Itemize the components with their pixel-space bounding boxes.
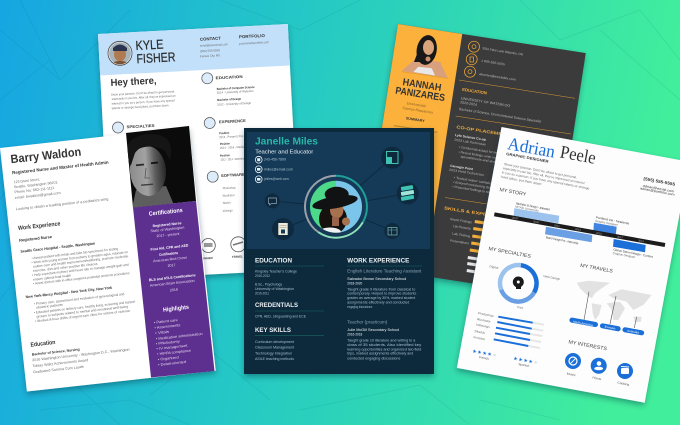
Kyle contact block — [200, 33, 269, 58]
Barry certifications: 2017 — [167, 263, 176, 268]
Kyle contact block: email@youremail.com — [200, 42, 228, 48]
Barry highlights: • Organized — [158, 355, 179, 362]
Barry work experience: • Primary care, assessment and evaluation of gynecological and — [34, 292, 125, 306]
Kyle education and experience lists: 2012 - 2014 - Marketing — [221, 156, 245, 162]
Adrian story timeline: MY STORY — [499, 187, 527, 198]
Barry highlights: • HIPPA compliance — [157, 349, 191, 356]
Adrian intro: especially in your bio. After all, they've impressed an interest — [503, 166, 585, 185]
Janelle education: 2010-2012 — [255, 274, 270, 278]
Adrian story timeline: NCAD University — [515, 205, 540, 213]
Kyle section headings and icons — [112, 73, 247, 182]
Kyle education and experience lists: 2014 - 2016 - Media — [220, 145, 244, 150]
Janelle education: University of Washington — [255, 287, 294, 291]
Barry education — [30, 340, 130, 374]
Adrian intro: in you as a person. If you have any special talents or strange — [502, 170, 590, 191]
Adrian name: Adrian — [506, 133, 557, 162]
Hannah co-op experience: • Record findings, write reports — [458, 150, 503, 161]
Adrian contact — [640, 176, 676, 197]
Hannah dividers — [445, 80, 575, 206]
Kyle education and experience lists: Photoshop — [223, 186, 236, 190]
Kyle interest icons: FINANCE — [202, 256, 213, 260]
Kyle name: KYLE — [135, 37, 164, 53]
Adrian story timeline: Graphic Designer — [612, 251, 636, 259]
Kyle intro paragraph — [111, 89, 176, 110]
resume: Adrian Peele — [457, 127, 680, 403]
Barry certifications — [149, 208, 196, 292]
Adrian travels map: North America — [573, 320, 594, 327]
Janelle header panel — [247, 132, 430, 249]
Barry certifications: 2017 - present — [156, 232, 180, 238]
Janelle key skills: Curriculum development — [255, 340, 294, 344]
Janelle work experience: English Literature Teaching Assistant — [347, 269, 422, 274]
Barry highlights: • Detail-oriented — [158, 360, 186, 367]
Janelle contact rows: 243-456-7899 — [264, 158, 286, 162]
Kyle name: FISHER — [136, 49, 176, 66]
Barry certifications: Certifications — [149, 208, 184, 218]
Adrian travels map: Europe — [604, 325, 616, 331]
Adrian story timeline: Portland Ink - freelance — [596, 215, 630, 226]
Janelle education: Kingsley Teacher's College — [255, 270, 297, 274]
Janelle education: EDUCATION — [255, 257, 293, 264]
Adrian intro: hard jokes, put them down — [501, 175, 542, 186]
Hannah skills and bars: Lab Testing — [452, 232, 470, 238]
Adrian intro — [501, 162, 590, 191]
Hannah co-op experience: • Entered monitoring data — [453, 180, 493, 190]
Barry work experience: • Worked 8-hour shifts of urgent care clinic for victims of violence — [35, 309, 131, 323]
Adrian intro: Show your passion. Don't be afraid to get personal, — [504, 162, 577, 179]
Janelle work experience: 2016-2018 — [347, 332, 362, 336]
Kyle education and experience lists: Position — [219, 131, 229, 135]
Barry certifications: American Brain Association — [150, 279, 195, 288]
Barry education: Graduated Summa Cum Laude — [33, 365, 84, 374]
Kyle contact block: Kansas City, MS — [200, 53, 220, 58]
Hannah dark page — [361, 24, 586, 295]
central portrait with progress ring — [305, 176, 367, 238]
Barry work experience — [18, 221, 136, 323]
Janelle work experience: Teacher (practicum) — [347, 319, 388, 324]
Barry education: Education — [30, 340, 56, 349]
Hannah co-op experience: 2023 Field Technician — [449, 168, 484, 177]
Hannah title and summary: Environmental — [407, 101, 426, 108]
Kyle education and experience lists: Position — [220, 141, 230, 146]
Barry work experience: obstetric patients — [36, 303, 63, 310]
Hannah contact text: 3015 Fake Lane Waterloo, ON — [482, 46, 524, 57]
Hannah co-op experience: • Conduct lab assays for testing — [459, 145, 503, 156]
Adrian travels map — [569, 263, 652, 336]
Janelle work experience: assignments effectively and conducted — [347, 300, 409, 304]
Adrian story timeline: Bachelor of Design - attended — [516, 201, 550, 212]
Kyle name — [135, 37, 176, 66]
Hannah education — [459, 87, 542, 124]
Kyle intro paragraph: talents or strange hard jokes, put them down — [112, 103, 169, 110]
Janelle credentials: CREDENTIALS — [255, 302, 298, 309]
Hannah co-op experience: 2023 Lab Technician — [454, 138, 487, 147]
Adrian specialties donut: Web Design — [543, 274, 561, 281]
Adrian story timeline: 2015 — [596, 231, 603, 236]
Janelle credentials — [255, 302, 307, 319]
Hannah name: PANIZARES — [395, 86, 446, 104]
Kyle contact block: yourdomainportfolio.com — [239, 40, 269, 46]
Barry education: Tobias Waltz Achievements Award — [32, 358, 88, 368]
Kyle interest icons: TRAVEL — [232, 254, 243, 259]
Adrian skill bars: Invision — [473, 335, 486, 341]
Barry page — [0, 127, 216, 392]
Kyle education and experience lists: 2016 - Present | Pos — [219, 134, 244, 139]
Barry contact and objective: Phone No: 682-111-1111 — [14, 186, 55, 194]
Janelle key skills — [255, 327, 294, 361]
Janelle contact rows: imiles@email.com — [264, 167, 293, 171]
Barry work experience: • Educated patients on delivery care, healthy living, screening and support — [34, 300, 136, 315]
Kyle contact block: PORTFOLIO — [239, 33, 266, 39]
Adrian story timeline: 2013 — [575, 227, 582, 232]
Barry certifications: 2018 — [170, 288, 178, 292]
Kyle education and experience lists: 2012 - University of Design — [217, 101, 252, 107]
Janelle education: B.Sc., Psychology — [255, 283, 282, 287]
Adrian title: GRAPHIC DESIGNER — [506, 152, 549, 164]
Adrian travels map: MY TRAVELS — [580, 263, 614, 275]
Adrian skill bars: InDesign — [476, 323, 490, 329]
Barry highlights: Highlights — [163, 305, 190, 314]
Barry work experience: Seattle Grace Hospital - Seattle, Washington — [20, 241, 96, 254]
Hannah education: UNIVERSITY OF WATERLOO — [461, 96, 511, 108]
Hannah title and summary — [394, 101, 437, 133]
Barry certifications: Certifications — [159, 251, 178, 257]
Hannah co-op experience: • Tested water samples — [453, 176, 494, 186]
Kyle education and experience lists: Bachelor of Design — [217, 97, 241, 102]
Barry education: 2016 Washington University - Washington D.C., Washington — [32, 348, 130, 362]
Barry certifications: BLS and ATLS Certifications — [149, 273, 196, 282]
Barry certifications: First Aid, CPR and AED — [150, 244, 189, 252]
Janelle work experience: engaging discussions — [347, 305, 373, 309]
Adrian specialties donut — [488, 246, 561, 310]
Janelle work experience: Salvador Brown Secondary School — [347, 277, 407, 281]
Barry work experience: routine care and health improvement/wellbeing, promote moderate — [33, 254, 129, 269]
Janelle work experience — [347, 257, 422, 360]
Kyle interest icons — [201, 237, 246, 260]
Hannah contact icons — [464, 41, 480, 77]
Barry education: Bachelor of Science, Nursing — [32, 347, 80, 357]
Adrian language stars: ★★★★★ — [513, 356, 539, 366]
Adrian specialties donut: MY SPECIALTIES — [488, 246, 532, 260]
Janelle work experience: 2018-2020 — [347, 281, 362, 285]
Barry highlights: • Assessments — [154, 323, 181, 330]
connector lines — [272, 158, 408, 231]
Janelle work experience: WORK EXPERIENCE — [347, 257, 409, 264]
Kyle greeting: Hey there, — [110, 76, 157, 89]
Adrian language stars: Spanish — [518, 362, 530, 368]
Barry certifications: Registered Nurse — [152, 221, 182, 228]
Janelle key skills: KEY SKILLS — [255, 327, 291, 334]
Kyle section headings and icons: EXPERIENCE — [219, 119, 247, 124]
Adrian skill bars: Illustrator — [477, 317, 491, 324]
Barry highlights: • Medication administration — [156, 332, 203, 341]
Barry work experience: • Help expectant mothers with heart rate to manage weight gain and — [32, 263, 129, 277]
resume: Hannah Panizares — [361, 24, 586, 295]
Adrian language stars: ★★★★★ — [472, 349, 498, 359]
Adrian skill bars: Photoshop — [478, 311, 494, 318]
resume: Kyle Fisher — [98, 24, 301, 280]
Janelle work experience: class of 35 students. Also identified key — [347, 343, 422, 347]
resume: Janelle Miles — [244, 128, 434, 374]
Barry certifications: American Red Cross — [153, 256, 187, 263]
Adrian skill bars: Sketch — [474, 329, 486, 335]
Janelle contact rows: jmiles@web.com — [263, 177, 289, 181]
Barry work experience: • Assist doctors with in-office surgeries postnatal sessions procedures — [33, 271, 130, 286]
Hannah skills and bars: Report Findings — [450, 217, 473, 224]
Adrian story timeline: 2009 — [533, 219, 540, 224]
Barry contact and objective: Looking to obtain a leading position of a pediatrics wing — [16, 197, 109, 211]
Hannah title and summary: SUMMARY — [406, 116, 426, 123]
Kyle education and experience lists: 2014 - University of Waterloo — [217, 89, 254, 95]
Janelle work experience: Taught grade 9 literature from classical to — [347, 287, 415, 291]
Adrian name: Peele — [559, 142, 598, 168]
Kyle education and experience lists: Sketch — [223, 201, 231, 205]
Adrian interests: Plants — [592, 376, 602, 381]
Barry work experience: • Work with young women from puberty to geriatric ages, educate on — [31, 250, 128, 265]
Hannah title and summary: Science Researcher — [402, 106, 434, 115]
Kyle portrait — [108, 40, 132, 66]
Barry job title: Registered Nurse and Master of Health Admin — [12, 160, 109, 175]
Janelle work experience: trips, marked assignments effectively and — [347, 352, 413, 356]
Hannah co-op experience: spreadsheets and analysis — [460, 155, 503, 165]
Adrian page — [457, 127, 680, 403]
Adrian skill bars — [473, 311, 544, 348]
Hannah yellow sidebar — [361, 24, 462, 276]
Janelle dark page — [244, 128, 434, 374]
Hannah skills and bars: Lab Research — [453, 224, 471, 231]
icon: schedule node — [384, 223, 400, 239]
Kyle section headings and icons: SPECIALTIES — [127, 124, 155, 129]
Barry certifications: State of Washington — [150, 226, 185, 233]
Janelle work experience: Taught grade 10 literature and writing to a — [347, 339, 415, 343]
Janelle work experience: learning opportunities and organized two field — [347, 347, 421, 351]
Kyle intro paragraph: interest in you as a person. If you have any special — [112, 98, 175, 106]
Kyle education and experience lists: InDesign — [223, 208, 233, 213]
Barry contact and objective — [14, 177, 109, 211]
Janelle work experience: conducted engaging discussions — [347, 356, 401, 360]
Kyle page — [98, 24, 301, 280]
resume: Barry Waldon — [0, 126, 216, 392]
icon: speech bubble node — [265, 194, 280, 208]
Janelle education — [255, 257, 297, 295]
Adrian specialties donut: Print — [517, 305, 524, 310]
Kyle intro paragraph: especially in your bio. After all, they've impressed an — [112, 94, 176, 101]
Adrian contact: adrian@portfolio.com — [640, 186, 675, 197]
Kyle education and experience lists: Bachelor of Computer Science — [217, 85, 255, 91]
Barry highlights — [154, 305, 203, 367]
Hannah contact text: 1 905-555-5555 — [481, 59, 505, 66]
icon: books node — [397, 182, 419, 204]
Hannah co-op experience: CO-OP PLACEMENT EXPERIENCE — [456, 124, 546, 143]
Barry work experience: exercise, diet and other positive life choices — [33, 262, 98, 273]
Adrian name — [506, 133, 598, 168]
Hannah co-op experience — [449, 124, 546, 195]
Kyle education and experience lists: Position — [220, 153, 230, 158]
Janelle work experience: Julie McGill Secondary School — [347, 328, 400, 332]
Hannah name — [395, 77, 446, 104]
Janelle education: 2016-2011 — [255, 291, 269, 295]
Adrian language stars: French — [479, 355, 490, 361]
Barry work experience: groups to subjects related to mental and emotional well-being — [36, 305, 128, 319]
Adrian story timeline: Brand Design Pro - Internship — [546, 235, 579, 245]
Adrian interests: MY INTERESTS — [568, 339, 608, 353]
Barry purple sidebar — [133, 201, 214, 378]
Hannah education: Bachelor of Science, Environmental Science Specialist — [459, 107, 542, 124]
Adrian story timeline: Graphic Designer — [595, 219, 618, 227]
Kyle header band — [98, 24, 290, 75]
icon: certificate node — [381, 147, 403, 169]
Barry contact and objective: Seattle, Washington 98101 — [14, 180, 58, 189]
Barry work experience: Work Experience — [18, 221, 61, 232]
Kyle education and experience lists — [217, 85, 255, 213]
Hannah contact text: aforster@weetabix.com — [479, 72, 516, 82]
Adrian story timeline: Clarus Storm Design - Current — [613, 248, 653, 259]
Hannah skills and bars: SKILLS & EXPERTISE — [444, 205, 504, 220]
Hannah portrait — [402, 33, 448, 78]
Adrian story timeline — [494, 187, 665, 259]
Janelle work experience: grades an average by 30%, marked student — [347, 296, 415, 300]
Adrian language stars — [472, 349, 539, 368]
Janelle section rules — [255, 266, 422, 336]
Barry highlights: • Phlebotomy — [156, 339, 180, 346]
Janelle key skills: ASILE teaching methods — [255, 357, 294, 361]
Kyle section headings and icons: EDUCATION — [216, 75, 243, 80]
Hannah contact text — [479, 46, 524, 82]
Kyle section headings and icons: SOFTWARE — [221, 173, 246, 178]
Adrian contact: (555) 555-5555 — [643, 176, 676, 187]
Hannah skills and bars — [444, 205, 504, 273]
icon: document node — [272, 218, 294, 240]
Adrian story timeline: 2011 — [554, 223, 561, 228]
Adrian story timeline: 2019 — [638, 238, 645, 243]
Adrian story timeline: 2007 — [512, 216, 519, 221]
Kyle intro paragraph: Show your passion. Don't be afraid to get personal, — [111, 89, 175, 97]
Adrian contact: adrian@email.com — [643, 184, 675, 194]
Kyle contact block: CONTACT — [200, 36, 221, 42]
Barry work experience: New York-Mercy Hospital - New York City, New York — [25, 286, 113, 299]
Barry contact and objective: email: bwaldon@gmail.com — [15, 191, 61, 200]
Adrian travels map: Australia — [627, 329, 640, 335]
Hannah co-op experience: Lyfe Science Co-op — [455, 133, 486, 142]
Adrian story timeline: 2017 — [617, 235, 624, 240]
Janelle key skills: Technology Integration — [255, 351, 292, 355]
Hannah co-op experience: Carnegie Point — [450, 164, 474, 171]
Janelle work experience: contemporary. Helped to improve students — [347, 292, 417, 296]
Hannah education: EDUCATION — [462, 87, 487, 96]
Janelle key skills: Classroom Management — [255, 346, 294, 350]
Hannah co-op experience: • Presented findings to staff — [452, 185, 492, 195]
Barry contact and objective: 123 Grant Street, — [14, 177, 40, 184]
Hannah skills and bars: Presentations — [450, 239, 470, 245]
Barry highlights: • Vitals — [155, 330, 170, 335]
Janelle credentials: CPR, AED, Lifeguarding and ECE — [255, 315, 307, 319]
Janelle title: Teacher and Educator — [255, 149, 313, 155]
Adrian interests — [565, 339, 633, 387]
Barry portrait — [126, 126, 196, 209]
Kyle education and experience lists: Illustrator — [223, 193, 235, 198]
Hannah education: 2020-2024 — [460, 100, 477, 107]
Hannah name: HANNAH — [402, 77, 442, 94]
Barry highlights: • Patient care — [154, 318, 178, 325]
Barry work experience: Registered Nurse — [19, 234, 53, 243]
Adrian interests: Cooking — [617, 381, 630, 387]
Barry highlights: • IV management — [156, 344, 188, 351]
Adrian specialties donut: Digital — [489, 264, 499, 270]
Barry work experience: ensure optimal fetal health — [33, 274, 71, 282]
Barry name: Barry Waldon — [10, 145, 82, 166]
Adrian interests: Music — [567, 372, 577, 377]
Kyle contact block: (555) 555-5555 — [200, 48, 220, 53]
Barry work experience: • Assess patient with rehab and take lab specimens for testing — [31, 247, 118, 260]
Janelle contact rows — [255, 156, 293, 183]
Janelle name: Janelle Miles — [255, 135, 318, 147]
